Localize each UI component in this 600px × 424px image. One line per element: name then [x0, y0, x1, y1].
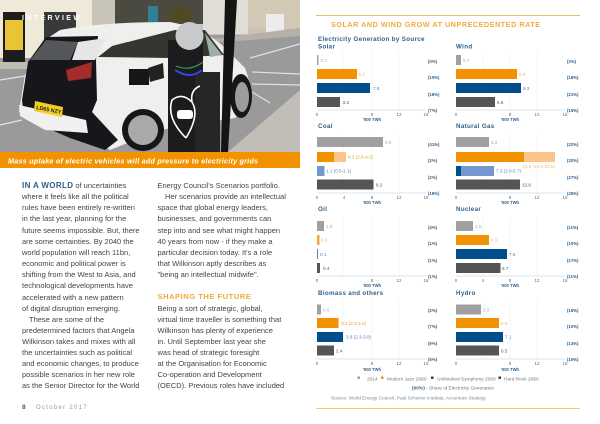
chart: natural gas: Natural Gas: [456, 123, 495, 130]
chart: coal: Coal: [318, 123, 333, 130]
article column 1: [21, 181, 140, 390]
article column 2: 40 years from now - if they make a: [158, 237, 273, 246]
chart: wind: (21%): [567, 92, 579, 97]
chart: wind: (15%): [567, 108, 579, 113]
article column 1: world population will reach 11bn,: [21, 248, 130, 257]
chart: natural gas: 7.3 (2.0-5.7): [496, 168, 521, 174]
chart: solar: 16: [424, 112, 429, 117]
article column 1: accelerated with a new pattern: [22, 293, 124, 302]
chart: wind: (3%): [567, 59, 577, 64]
chart: natural gas: 0: [455, 195, 458, 200]
chart: solar: 12: [397, 112, 402, 117]
chart: hydro: (15%): [567, 357, 579, 362]
chart: oil: 8: [371, 278, 374, 283]
chart: nuclear: 7.6: [509, 252, 516, 257]
chart: wind: 0: [455, 112, 458, 117]
chart: biomass and others: 16: [424, 361, 429, 366]
article column 2: [156, 181, 286, 390]
chart: hydro: (10%): [567, 324, 579, 329]
chart: solar: 0.2: [320, 58, 327, 63]
chart: natural gas: (22%): [567, 142, 579, 147]
source note: Source: World Energy Council, Paul Scherrer Institute, Accenture Strategy: [331, 396, 487, 402]
chart: hydro: 6.8: [501, 321, 508, 326]
article column 2: Co-operation and Development: [158, 370, 263, 379]
chart: hydro: 16: [563, 361, 568, 366]
chart: nuclear: Nuclear: [456, 206, 481, 213]
legend: Unfinished Symphony 2060: [437, 376, 496, 382]
article column 2: (OECD). Previous roles have included: [158, 381, 284, 390]
chart: biomass and others: 2.4: [336, 348, 343, 354]
chart: oil: 16: [424, 278, 429, 283]
legend: [358, 376, 539, 382]
chart: hydro: 0: [455, 361, 458, 366]
article column 2: Wilkinson has plenty of experience: [158, 326, 273, 335]
caption bar: [0, 152, 300, 168]
infographic title: SOLAR AND WIND GROW AT UNPRECEDENTED RATE: [331, 20, 540, 29]
chart: hydro: (16%): [567, 308, 579, 313]
chart: oil: [316, 206, 438, 288]
chart: hydro: 8: [509, 361, 512, 366]
article column 1: rules have been entirely re-written: [22, 203, 135, 212]
chart: solar: (10%): [428, 75, 440, 80]
chart: solar: 0: [316, 112, 319, 117]
article column 2: at the Organisation for Economic: [158, 359, 267, 368]
chart: hydro: '000 TWh: [501, 367, 520, 372]
article column 1: where it feels like all the political: [21, 192, 129, 201]
chart: biomass and others: (7%): [428, 324, 438, 329]
legend: Hard Rock 2060: [504, 376, 539, 382]
article column 1: as the Senior Director for the World: [22, 381, 139, 390]
article column 1: are some certainties. By 2040 the: [22, 237, 134, 246]
article column 1: predetermined factors that Angela: [22, 326, 135, 335]
chart: natural gas: (32%): [567, 158, 579, 163]
chart: biomass and others: [316, 290, 438, 372]
chart: solar: (18%): [428, 92, 440, 97]
chart: coal: 1.1 (0.5-1.1): [326, 168, 351, 174]
chart: natural gas: 8: [509, 195, 512, 200]
chart: solar: 3.3: [342, 100, 349, 105]
chart: biomass and others: 0: [316, 361, 319, 366]
chart: coal: 4: [343, 195, 346, 200]
article column 1: possible scenarios in her new role: [22, 370, 135, 379]
footer: page number and date: [22, 404, 88, 411]
article column 1: shifting from the West to Asia, and: [22, 270, 136, 279]
chart: coal: (41%): [428, 142, 440, 147]
chart: wind: 16: [563, 112, 568, 117]
chart: biomass and others: (2%): [428, 308, 438, 313]
chart: oil: 1.0: [326, 224, 333, 229]
chart: coal: [316, 123, 440, 205]
chart: coal: 9.6: [385, 140, 392, 145]
article column 1: technological developments have: [22, 281, 133, 290]
chart: wind: Wind: [456, 44, 472, 50]
chart: hydro: [455, 290, 579, 372]
article column 1: future seems impossible. But, there: [22, 226, 140, 235]
chart: solar: 8: [371, 112, 374, 117]
chart: natural gas: 13.8: [522, 182, 531, 188]
chart: nuclear: '000 TWh: [501, 283, 520, 288]
article column 1: economic and political power is: [22, 259, 126, 268]
article column 2: space that global energy leaders,: [158, 203, 268, 212]
article column 2: Energy Council's Scenarios portfolio.: [158, 181, 280, 190]
chart: nuclear: 12: [535, 278, 540, 283]
chart: hydro: Hydro: [456, 290, 476, 297]
article column 1: the uncertainties such as political: [22, 348, 132, 357]
chart: hydro: 3.9: [483, 308, 490, 312]
chart: natural gas: 12: [535, 195, 540, 200]
chart: oil: (1%): [428, 241, 438, 246]
chart: oil: (4%): [428, 225, 438, 230]
chart: nuclear: 8: [509, 278, 512, 283]
chart: wind: 12: [535, 112, 540, 117]
chart: solar: '000 TWh: [363, 117, 382, 122]
chart: coal: 0: [316, 195, 319, 200]
chart: oil: Oil: [318, 206, 327, 213]
chart: biomass and others: 3.8 (2.3-3.8): [346, 334, 371, 340]
chart: biomass and others: 12: [397, 361, 402, 366]
chart: nuclear: 2.5: [475, 224, 482, 229]
footer: page number and date: 8: [22, 404, 26, 411]
chart: natural gas: 16: [563, 195, 568, 200]
chart: natural gas: '000 TWh: [501, 200, 520, 205]
article column 2: that Wilkinson aptly describes as: [158, 259, 267, 268]
article column 2: businesses, and governments can: [158, 214, 271, 223]
chart: nuclear: 4.9: [491, 238, 498, 242]
chart: solar: (0%): [428, 59, 438, 64]
footer: page number and date: October 2017: [36, 405, 88, 411]
chart: coal: 8: [371, 195, 374, 200]
article column 2: SHAPING THE FUTURE: [158, 292, 251, 301]
chart: oil: 0.1: [320, 252, 327, 257]
chart: nuclear: 4: [482, 278, 485, 283]
chart: nuclear: [455, 206, 579, 288]
legend: 2014: [367, 376, 378, 382]
chart: coal: (2%): [428, 158, 438, 163]
article column 2: was head of strategic foresight: [156, 348, 260, 357]
chart: natural gas: (27%): [567, 175, 579, 180]
article column 1: of digital disruption emerging.: [22, 304, 120, 313]
chart: oil: 12: [397, 278, 402, 283]
chart: hydro: 6.5: [501, 348, 508, 354]
article column 2: virtual time traveller is something that: [158, 315, 282, 324]
chart: biomass and others: '000 TWh: [363, 367, 382, 372]
chart heading: Electricity Generation by Source: [318, 36, 425, 43]
chart: wind: 8: [509, 112, 512, 117]
legend: Modern Jazz 2060: [387, 376, 427, 382]
chart: nuclear: (17%): [567, 258, 579, 263]
article column 2: step into and see what might happen: [158, 226, 280, 235]
article column 1: and economic changes, to produce: [22, 359, 139, 368]
chart: coal: 16: [424, 195, 429, 200]
chart: wind: (18%): [567, 75, 579, 80]
chart: oil: 0.4: [323, 266, 330, 271]
chart: nuclear: (11%): [567, 274, 579, 279]
legend note: share of generation: (00%) - Share of Electricity Generation: [412, 386, 494, 392]
section label: interview: INTERVIEW: [22, 15, 82, 22]
chart: coal: 12: [397, 195, 402, 200]
chart: solar: (7%): [428, 108, 438, 113]
article column 1: IN A WORLD of uncertainties: [22, 181, 126, 190]
chart: oil: (1%): [428, 258, 438, 263]
caption bar: Mass uptake of electric vehicles will add pressure to electricity grids: [8, 156, 258, 166]
chart: natural gas: (26%): [567, 191, 579, 196]
article column 2: in. Until September last year she: [158, 337, 266, 346]
chart: biomass and others: 0.6: [323, 308, 330, 312]
article column 2: Her scenarios provide an intellectual: [165, 192, 286, 201]
article column 1: in the last year, planning for the: [22, 214, 126, 223]
photo: electric car charging: [0, 0, 300, 152]
chart: coal: '000 TWh: [363, 200, 382, 205]
chart: oil: (1%): [428, 274, 438, 279]
chart: natural gas: 5.2: [491, 140, 498, 145]
chart: hydro: 12: [535, 361, 540, 366]
chart: nuclear: 16: [563, 278, 568, 283]
chart: biomass and others: Biomass and others: [318, 290, 384, 297]
chart: wind: [455, 44, 579, 122]
chart: natural gas: [455, 123, 579, 205]
article column 1: These are some of the: [29, 315, 104, 324]
chart: nuclear: 0: [455, 278, 458, 283]
chart: biomass and others: (5%): [428, 357, 438, 362]
chart: coal: (18%): [428, 191, 440, 196]
chart: solar: [316, 44, 440, 122]
chart: solar: 5.7: [358, 72, 365, 77]
chart: coal: 4.2 (2.5-4.2): [348, 154, 373, 160]
photo: electric car charging: LD65 NZY: [36, 105, 62, 116]
chart: nuclear: (11%): [567, 225, 579, 230]
chart: oil: 0.3: [321, 238, 328, 242]
chart: biomass and others: (9%): [428, 341, 438, 346]
chart: oil: '000 TWh: [363, 283, 382, 288]
chart: natural gas: 15.5 (12.5-15.5): [522, 164, 555, 169]
chart: oil: 0: [316, 278, 319, 283]
article column 2: particular decision today. It's a role: [158, 248, 272, 257]
chart: biomass and others: 8: [371, 361, 374, 366]
chart: biomass and others: 3.2 (2.3-3.2): [341, 321, 366, 326]
chart: nuclear: 6.7: [502, 266, 509, 271]
chart: wind: '000 TWh: [501, 117, 520, 122]
article column 2: Being a sort of strategic, global,: [158, 304, 263, 313]
chart: hydro: 7.1: [505, 334, 512, 340]
chart: wind: 8.9: [519, 72, 526, 77]
chart: wind: 5.6: [497, 100, 504, 105]
chart: coal: 8.2: [376, 182, 383, 188]
chart: hydro: (14%): [567, 341, 579, 346]
chart: wind: 0.7: [463, 58, 470, 63]
article column 2: "being an intellectual midwife".: [158, 270, 259, 279]
chart: coal: (2%): [428, 175, 438, 180]
chart: wind: 9.3: [523, 86, 530, 91]
chart: solar: 7.8: [373, 86, 380, 91]
article column 1: Wilkinson takes and mixes with all: [22, 337, 136, 346]
chart: solar: Solar: [318, 44, 335, 50]
chart: nuclear: (10%): [567, 241, 579, 246]
